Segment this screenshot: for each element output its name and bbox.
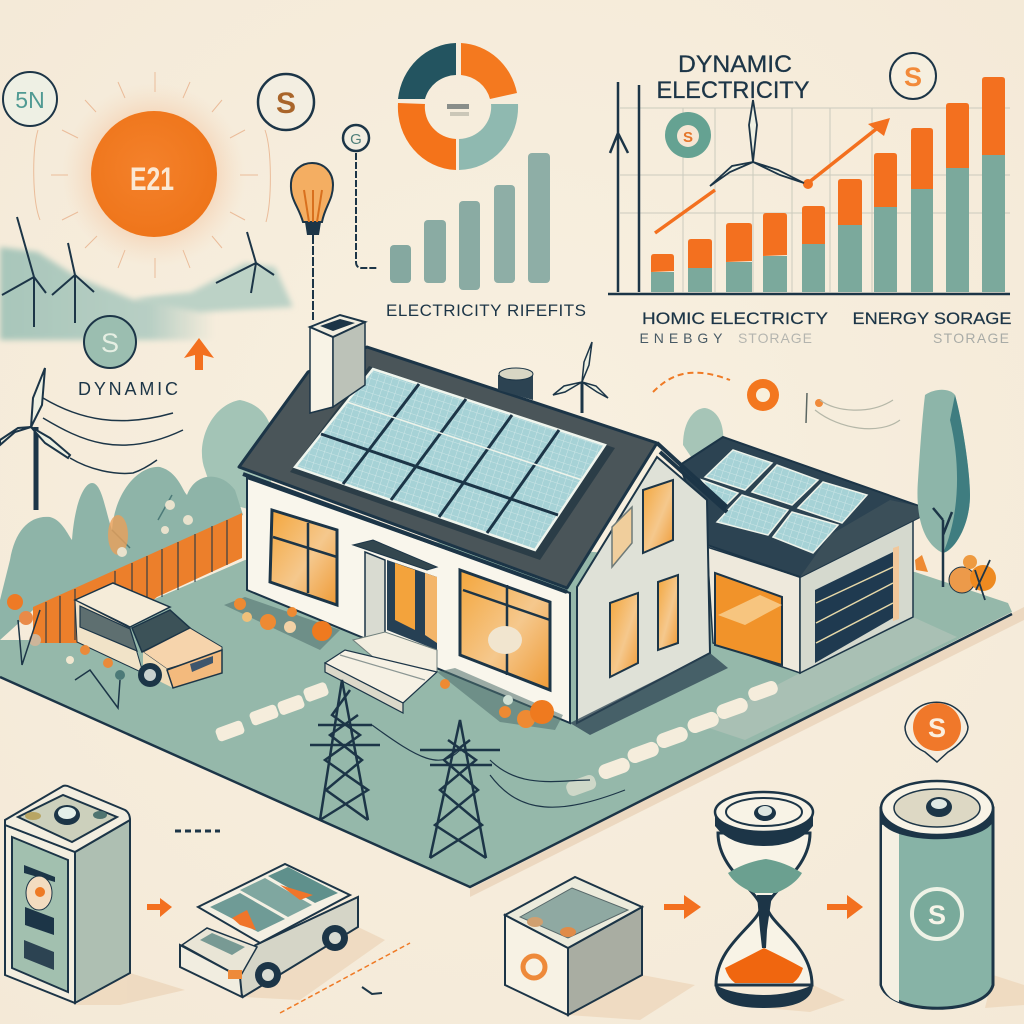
coin in chart: S xyxy=(683,129,693,146)
arrow: to hourglass xyxy=(664,895,701,919)
coin icon: top left xyxy=(3,72,57,126)
side windows xyxy=(610,480,678,677)
car xyxy=(75,583,222,688)
coin in chart xyxy=(665,112,711,158)
turbine in chart xyxy=(710,100,804,186)
large battery: S xyxy=(928,900,946,930)
steps xyxy=(325,632,437,713)
arrow: to car xyxy=(147,898,172,917)
chart labels xyxy=(640,309,1012,346)
car with panels xyxy=(180,864,358,997)
chart labels: ENEBGY xyxy=(640,330,723,346)
trend arrow xyxy=(655,118,890,233)
coin icon: dollar xyxy=(258,74,314,130)
sun rays xyxy=(34,72,270,278)
donut chart xyxy=(398,43,518,170)
hills xyxy=(0,247,293,340)
chimney xyxy=(310,315,365,413)
icon: light bulb xyxy=(291,163,333,320)
dynamic label with coin xyxy=(78,316,178,399)
dynamic label with coin: S xyxy=(101,328,119,358)
flower beds at the house xyxy=(224,597,563,730)
chart labels: STORAGE xyxy=(738,330,812,346)
coin above battery xyxy=(905,702,968,762)
sun with hills and turbines xyxy=(0,72,293,340)
floor shadows xyxy=(75,927,1024,1020)
coin icon: top left: 5N xyxy=(15,87,45,113)
chart labels: ENERGY SORAGE xyxy=(852,309,1012,328)
house xyxy=(239,315,922,735)
dashed arrow lower xyxy=(280,943,410,1013)
bar chart: electricity tariffs xyxy=(386,153,586,320)
chart heading: DYNAMIC xyxy=(678,51,792,78)
battery cabinet xyxy=(5,786,130,1003)
sun disc: E21 xyxy=(130,161,174,197)
dash connector xyxy=(175,830,220,832)
hourglass xyxy=(715,792,813,1008)
turbines xyxy=(2,217,274,327)
chart heading xyxy=(656,51,810,104)
storage box xyxy=(505,877,642,1015)
dynamic label with coin: DYNAMIC xyxy=(78,379,178,399)
window left xyxy=(270,510,337,605)
chart caption: ELECTRICITY RIFEFITS xyxy=(386,301,586,320)
side gable wall xyxy=(577,457,710,723)
roof xyxy=(239,347,657,588)
panel: dynamic electricity chart xyxy=(608,51,1012,346)
pylons xyxy=(310,680,625,858)
dashed line with coin xyxy=(653,373,900,429)
chart labels: STORAGE xyxy=(933,330,1009,346)
porch door xyxy=(353,540,437,650)
solar panels main xyxy=(290,366,615,560)
icon: small pin xyxy=(343,125,377,268)
large battery xyxy=(881,781,993,1008)
garage xyxy=(680,437,922,673)
arrow: to battery xyxy=(827,895,863,919)
small tree behind garage xyxy=(683,408,723,470)
arrow: up xyxy=(184,338,214,370)
axes xyxy=(608,82,1010,294)
road dashes xyxy=(214,679,779,798)
lawn ground xyxy=(0,540,1024,897)
right flowers xyxy=(915,555,996,600)
chart labels: HOMIC ELECTRICTY xyxy=(642,309,828,328)
left shrubs xyxy=(7,594,125,708)
left trees and power lines xyxy=(0,368,273,640)
tree: right xyxy=(917,390,970,587)
fence xyxy=(33,513,242,643)
small turbine xyxy=(553,342,608,413)
coin above chart: S xyxy=(904,62,922,92)
chart heading: ELECTRICITY xyxy=(656,77,810,104)
window center xyxy=(460,570,550,690)
front wall xyxy=(247,478,570,723)
roof vent xyxy=(498,368,533,400)
coin above battery: S xyxy=(928,713,946,743)
stacked bars xyxy=(651,77,1005,292)
coin above chart xyxy=(890,53,936,99)
coin icon: dollar: S xyxy=(276,87,296,120)
sun disc xyxy=(91,111,217,237)
icon: small pin: G xyxy=(350,131,362,148)
